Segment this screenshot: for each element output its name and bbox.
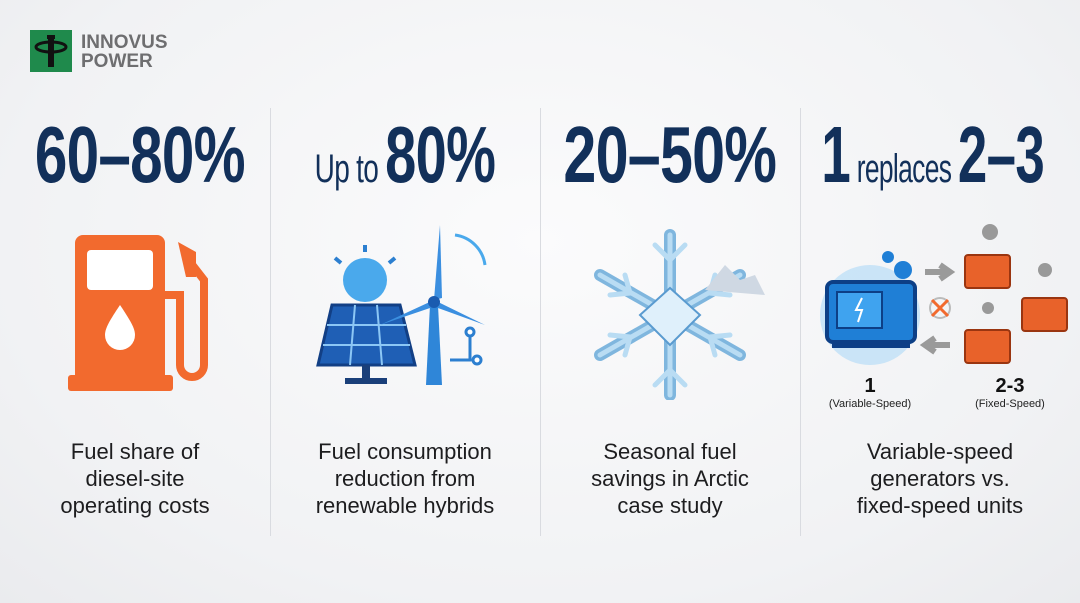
icon: generators: 1 [864,375,876,397]
icon: snowflake [594,229,765,400]
icon: generators: (Variable-Speed) [829,398,911,410]
caption [60,439,210,518]
heading: 1 replaces 2-3: 1 replaces 2–3 [822,110,1044,199]
heading: 60-80%: 60–80% [35,110,245,199]
icon: generators: 2-3 [996,375,1024,397]
icon: generators: (Fixed-Speed) [975,398,1045,410]
panel: fuel share [35,110,1009,518]
logo: POWER [81,51,153,72]
caption [857,439,1023,518]
caption: diesel-site [85,466,185,491]
icon: fuel pump [68,235,208,391]
logo: INNOVUS [81,32,168,53]
caption: Seasonal fuel [603,439,737,464]
caption [316,439,494,518]
heading: up to 80%: Up to 80% [315,110,495,199]
caption: generators vs. [870,466,1010,491]
panel: variable speed [820,110,1068,518]
logo [30,30,168,72]
heading: 20-50%: 20–50% [564,110,776,199]
caption: case study [617,493,723,518]
panel: renewable hybrids [315,110,1009,518]
caption: renewable hybrids [316,493,494,518]
caption: Variable-speed [867,439,1013,464]
caption: savings in Arctic [591,466,749,491]
caption: operating costs [60,493,210,518]
caption: Fuel share of [71,439,199,464]
caption: Fuel consumption [318,439,492,464]
icon: solar and wind [316,226,486,385]
panel: arctic [564,110,1009,518]
caption: reduction from [335,466,475,491]
icon: generators [820,224,1068,410]
caption [591,439,749,518]
caption: fixed-speed units [857,493,1023,518]
